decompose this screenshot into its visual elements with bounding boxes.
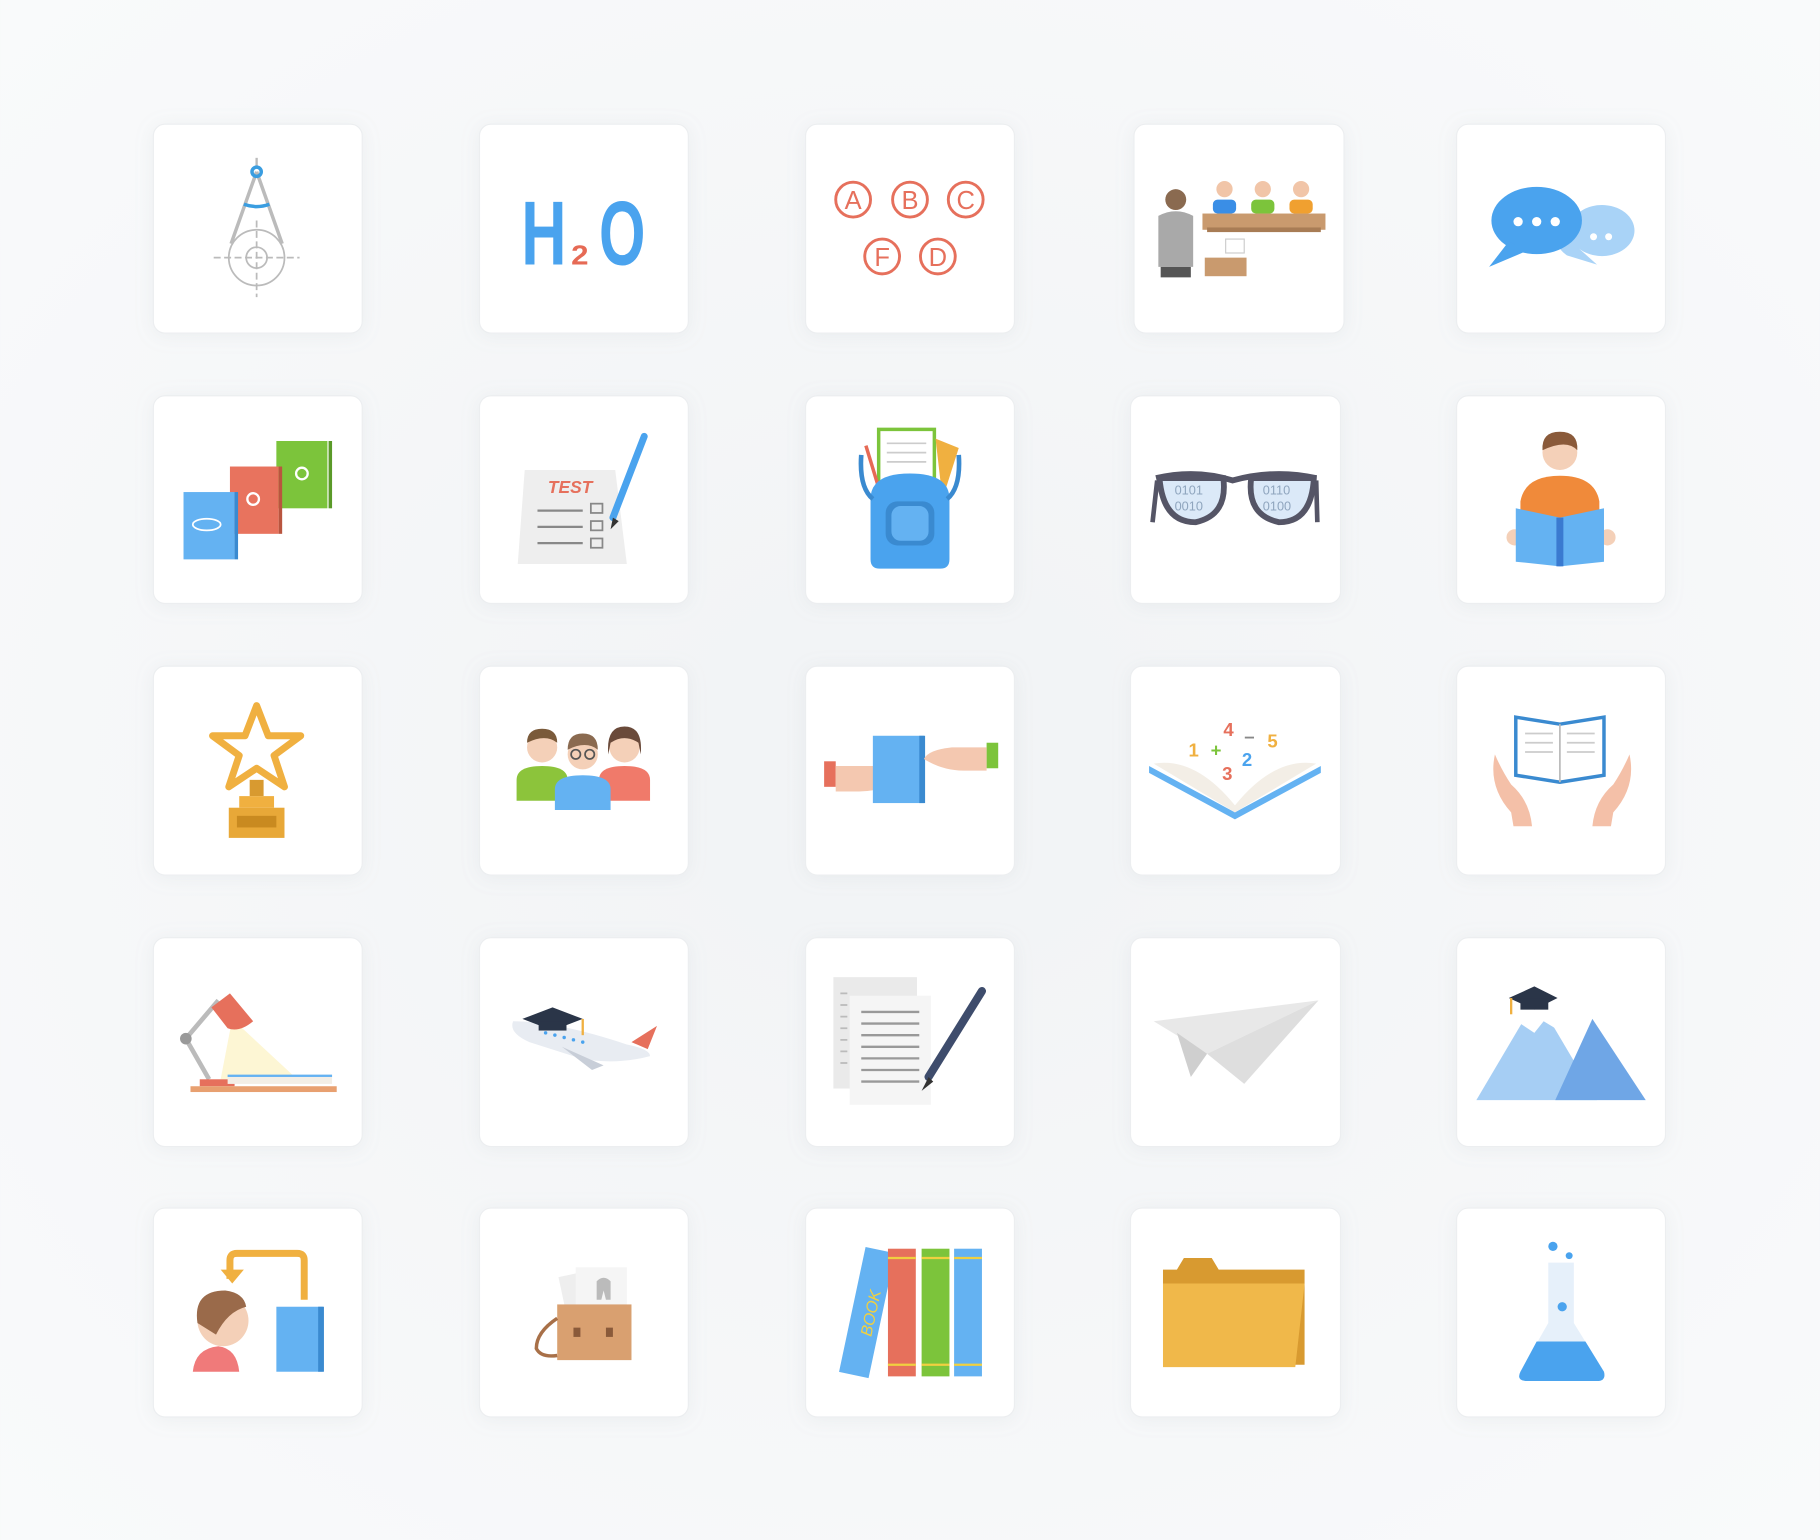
icon: star trophy — [213, 706, 301, 838]
icon: grades ABCFD — [836, 182, 983, 274]
icon: chat bubbles — [1489, 187, 1634, 267]
icon: grades ABCFD: F — [874, 244, 890, 272]
icon: grades ABCFD: D — [929, 244, 947, 272]
icon: H2O: H — [521, 184, 566, 285]
icon: grades ABCFD: A — [845, 187, 862, 215]
icon: open math book: 2 — [1242, 749, 1252, 770]
icon: open math book — [1149, 719, 1321, 819]
icon: people group — [517, 726, 650, 810]
icon: grades ABCFD: C — [956, 187, 975, 215]
icon: binary glasses: 0101 — [1175, 482, 1203, 497]
icon: flask — [1519, 1242, 1604, 1381]
icon: open math book: + — [1211, 740, 1222, 761]
icon: compass — [214, 158, 300, 297]
icon: backpack — [861, 429, 959, 569]
icon: H2O: O — [599, 184, 645, 285]
icon: graduation plane — [512, 1007, 657, 1070]
icon: binary glasses — [1153, 474, 1317, 522]
icon: test paper — [518, 436, 644, 564]
icon: grades ABCFD: B — [901, 187, 919, 215]
icon: person thinking book — [193, 1253, 324, 1372]
icon: book handover — [824, 736, 998, 803]
icon: H2O: 2 — [571, 240, 589, 271]
icon: open math book: 4 — [1223, 719, 1234, 740]
icon: open math book: – — [1244, 726, 1255, 747]
icon: paper plane — [1154, 1000, 1319, 1084]
icon: open math book: 1 — [1189, 740, 1199, 761]
icon: briefcase with papers — [536, 1267, 631, 1360]
icon: bookshelf: BOOK — [858, 1287, 885, 1338]
icon: binary glasses: 0100 — [1263, 499, 1291, 514]
icon: hands holding book — [1493, 717, 1631, 826]
icon: reader — [1507, 432, 1616, 566]
icon: bookshelf — [839, 1247, 982, 1378]
icon: classroom — [1158, 181, 1325, 277]
icon: desk lamp — [180, 993, 337, 1092]
icon: mountain graduation — [1476, 986, 1646, 1100]
icon: test paper: TEST — [548, 477, 594, 497]
icon: binary glasses: 0110 — [1263, 482, 1290, 497]
icon: open math book: 3 — [1222, 763, 1233, 784]
icon: science books — [184, 441, 332, 559]
icon: H2O — [521, 184, 645, 285]
icon: open math book: 5 — [1267, 730, 1278, 751]
card grid — [153, 124, 1665, 1417]
icon: documents and pen — [833, 977, 982, 1105]
icon: binary glasses: 0010 — [1175, 499, 1203, 514]
icon: folder — [1163, 1258, 1305, 1367]
